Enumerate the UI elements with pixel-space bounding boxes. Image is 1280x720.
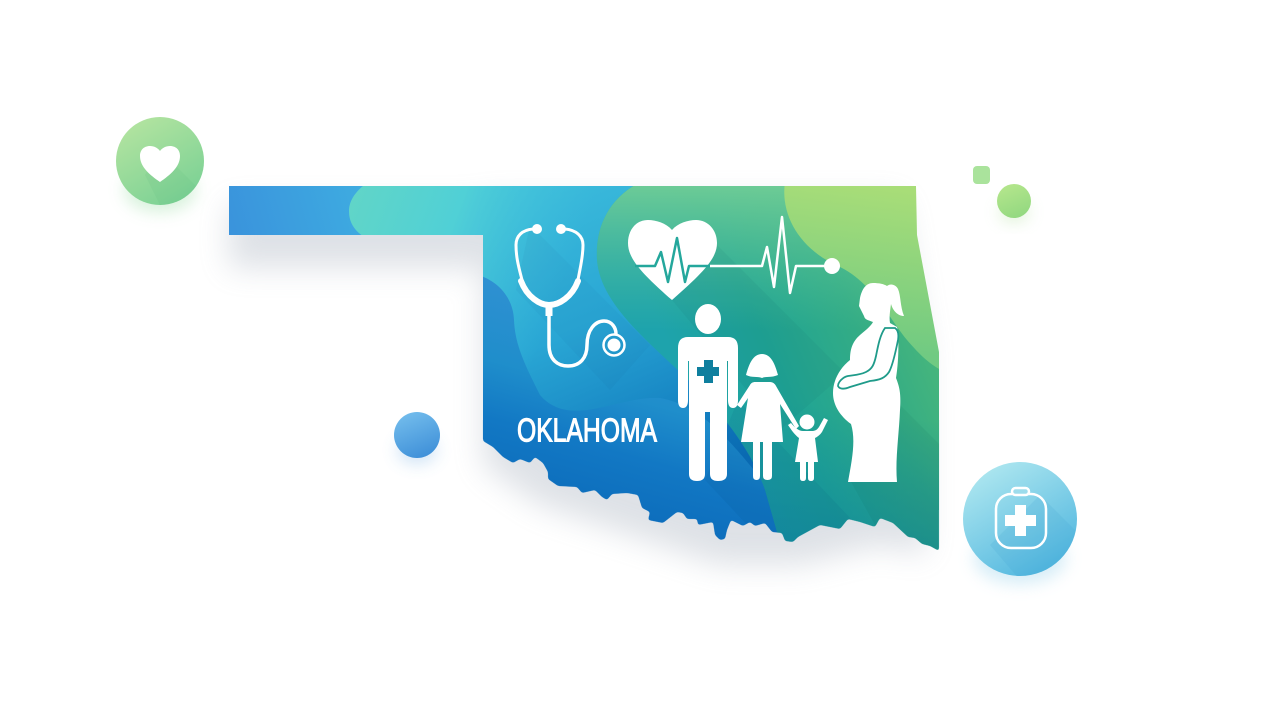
figure: pregnant woman xyxy=(833,283,904,482)
figure: girl xyxy=(737,354,799,480)
badge: green heart xyxy=(116,117,204,205)
icon: medical bottle with plus xyxy=(996,488,1046,548)
map drop shadow xyxy=(229,200,925,565)
decorative dot: blue xyxy=(394,412,440,458)
icon: stethoscope xyxy=(516,224,624,366)
label: OKLAHOMA: OKLAHOMA xyxy=(517,412,657,450)
figure: toddler xyxy=(788,414,828,481)
dot shadow: blue xyxy=(397,436,437,464)
icon: heart xyxy=(140,146,180,182)
badge shadow: clipboard xyxy=(974,532,1066,584)
decorative square: green xyxy=(973,166,990,184)
badge shadow: heart xyxy=(124,168,196,212)
dot shadow: green xyxy=(999,202,1029,222)
badge: medical kit xyxy=(963,462,1080,580)
figure: adult with medical cross xyxy=(678,304,738,481)
long shadows xyxy=(516,225,650,390)
Oklahoma state map xyxy=(225,182,960,570)
map colour bands xyxy=(225,182,960,570)
icon: heart with ECG line xyxy=(628,217,840,300)
decorative dot: green xyxy=(997,184,1031,218)
